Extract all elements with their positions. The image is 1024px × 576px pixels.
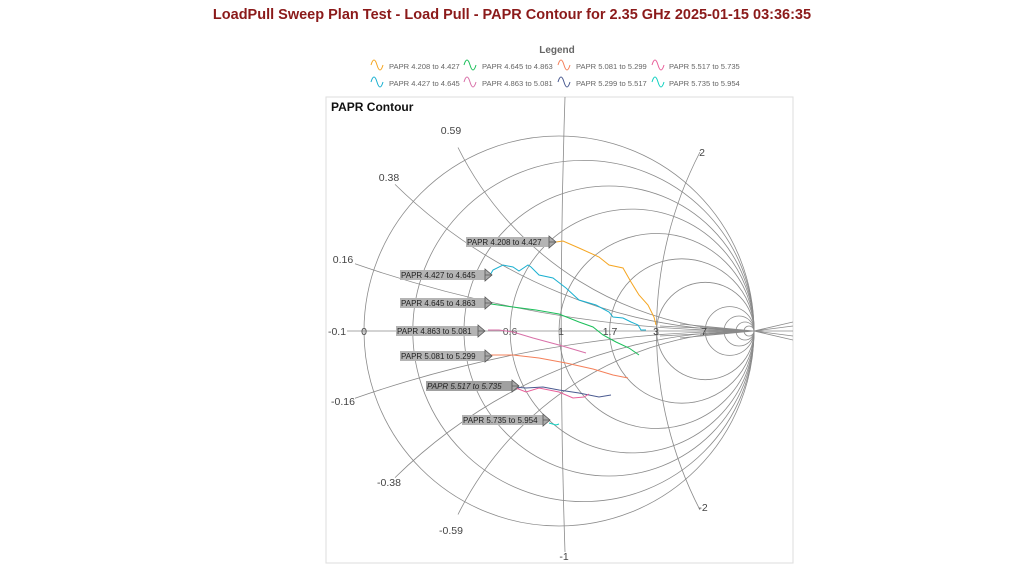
- legend: [371, 45, 740, 88]
- legend: Legend: [539, 45, 575, 56]
- contour labels: PAPR 5.517 to 5.735: [427, 382, 502, 391]
- axis labels: -0.38: [377, 477, 401, 489]
- chart title: PAPR Contour: [331, 100, 414, 114]
- legend: PAPR 4.645 to 4.863: [482, 62, 553, 71]
- axis labels: -1: [559, 551, 569, 563]
- axis labels: [328, 125, 708, 563]
- axis labels: -0.1: [328, 326, 346, 338]
- axis labels: 7: [701, 326, 707, 338]
- panel: smith chart: [326, 97, 793, 563]
- contour labels: PAPR 5.735 to 5.954: [463, 416, 538, 425]
- axis labels: 3: [653, 326, 659, 338]
- legend: PAPR 5.735 to 5.954: [669, 79, 740, 88]
- contour labels: PAPR 4.427 to 4.645: [401, 271, 476, 280]
- legend: PAPR 4.863 to 5.081: [482, 79, 553, 88]
- axis labels: 0.16: [333, 254, 353, 266]
- contour labels: PAPR 4.208 to 4.427: [467, 238, 542, 247]
- contour labels: [396, 236, 556, 426]
- contour labels: PAPR 4.645 to 4.863: [401, 299, 476, 308]
- axis labels: 0.6: [503, 326, 517, 338]
- legend: PAPR 4.208 to 4.427: [389, 62, 460, 71]
- contour labels: PAPR 4.863 to 5.081: [397, 327, 472, 336]
- axis labels: 0: [361, 326, 367, 338]
- axis labels: -0.59: [439, 525, 463, 537]
- axis labels: 1: [558, 326, 564, 338]
- title: LoadPull Sweep Plan Test - Load Pull - PAPR Contour for 2.35 GHz 2025-01-15 03:36:35: [213, 7, 811, 23]
- contour labels: PAPR 5.081 to 5.299: [401, 352, 476, 361]
- legend: PAPR 5.517 to 5.735: [669, 62, 740, 71]
- axis labels: 0.38: [379, 172, 399, 184]
- axis labels: -2: [698, 502, 708, 514]
- legend: PAPR 5.299 to 5.517: [576, 79, 647, 88]
- axis labels: 1.7: [603, 326, 617, 338]
- legend: PAPR 4.427 to 4.645: [389, 79, 460, 88]
- axis labels: 2: [699, 147, 705, 159]
- axis labels: 0.59: [441, 125, 461, 137]
- axis labels: -0.16: [331, 396, 355, 408]
- legend: PAPR 5.081 to 5.299: [576, 62, 647, 71]
- contour curves: [488, 241, 656, 425]
